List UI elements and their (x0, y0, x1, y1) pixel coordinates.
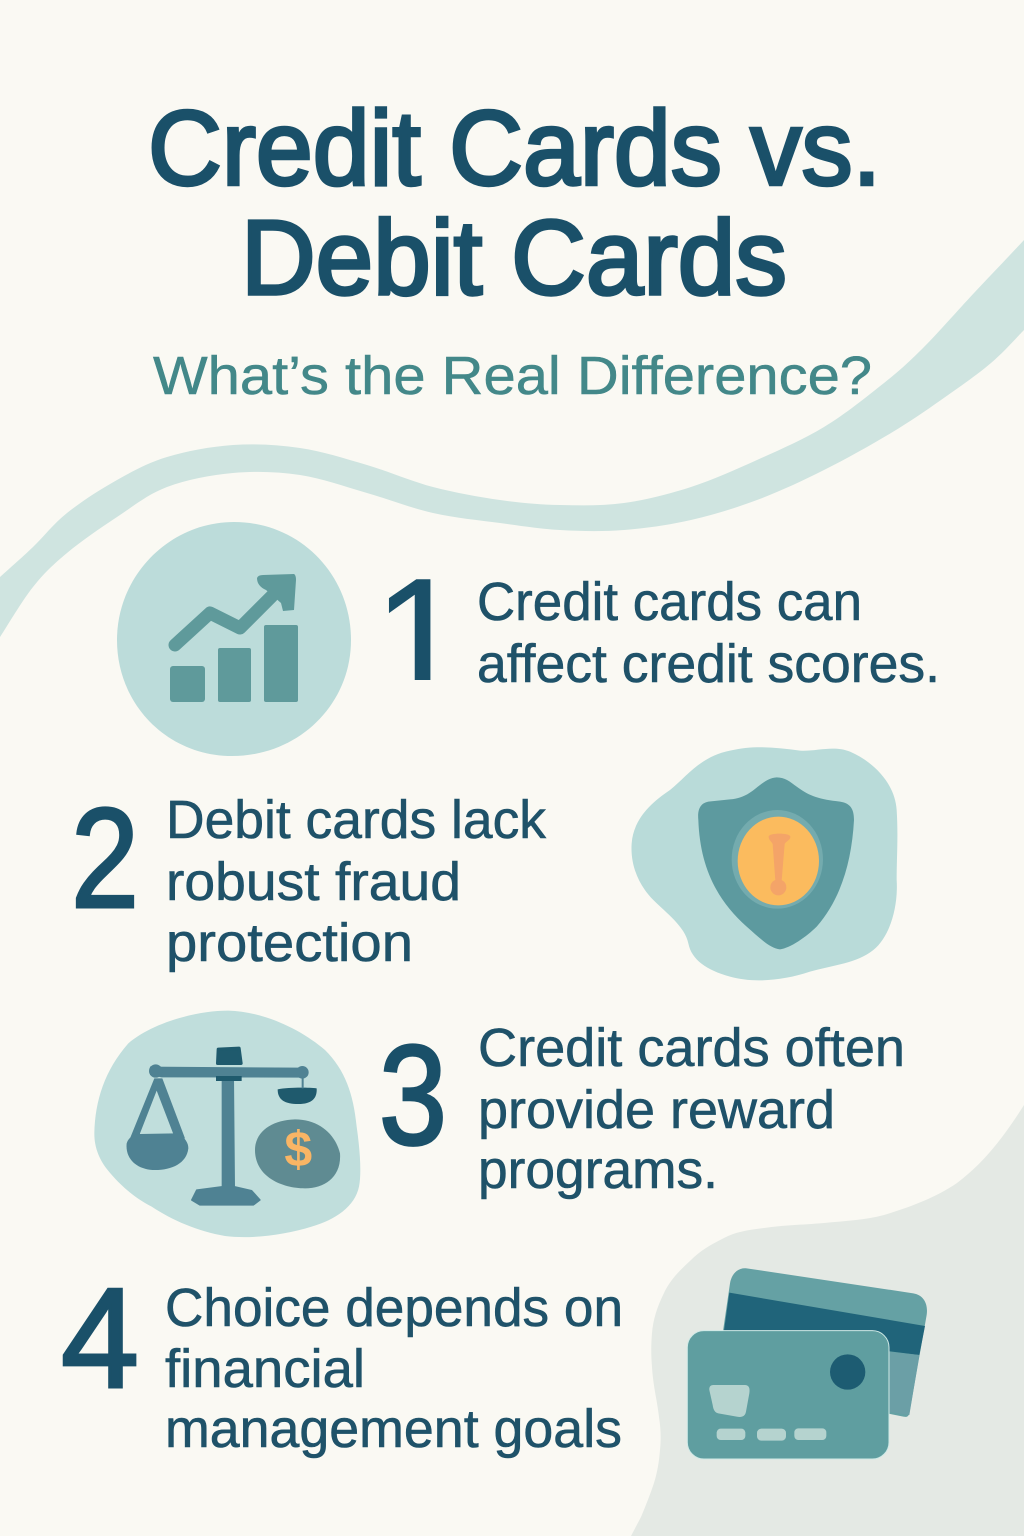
text: point 3: Credit cards often (478, 1018, 905, 1078)
panel: point 4 financial goals (61, 1259, 927, 1459)
text: point 2: protection (166, 913, 413, 973)
panel: point 2 fraud protection (71, 747, 897, 980)
text: point 2: robust fraud (166, 852, 461, 912)
text: point 4: Choice depends on (165, 1278, 623, 1338)
title: Credit Cards vs. (148, 90, 881, 208)
text: point 1: Credit cards can (477, 572, 862, 632)
text: point 4 (165, 1278, 623, 1459)
icon: shield with alert (631, 747, 897, 980)
panel: point 3 rewards (94, 1011, 905, 1237)
text: point 3: provide reward (478, 1080, 835, 1140)
icon: scale and money bag (94, 1011, 360, 1237)
text: point 1: affect credit scores. (477, 634, 940, 694)
subtitle: What’s the Real Difference? (153, 346, 872, 406)
text: point 4: management goals (165, 1399, 622, 1459)
number 1: 1 (374, 545, 466, 730)
number 3: 3 (379, 1016, 447, 1175)
icon: rising bar chart (117, 522, 351, 756)
text: point 2: Debit cards lack (166, 790, 547, 850)
number 2: 2 (71, 779, 139, 938)
icon: credit cards (687, 1268, 927, 1459)
text: point 4: financial (165, 1339, 365, 1399)
number 4: 4 (61, 1259, 139, 1418)
text: point 1 (477, 572, 940, 694)
text: point 3 (478, 1018, 905, 1200)
title: Debit Cards (241, 199, 787, 317)
title (148, 90, 881, 317)
text: point 3: programs. (478, 1140, 718, 1200)
panel: point 1 credit scores (117, 522, 940, 756)
text: point 2 (166, 790, 547, 973)
icon: scale and money bag: $ (284, 1122, 312, 1178)
